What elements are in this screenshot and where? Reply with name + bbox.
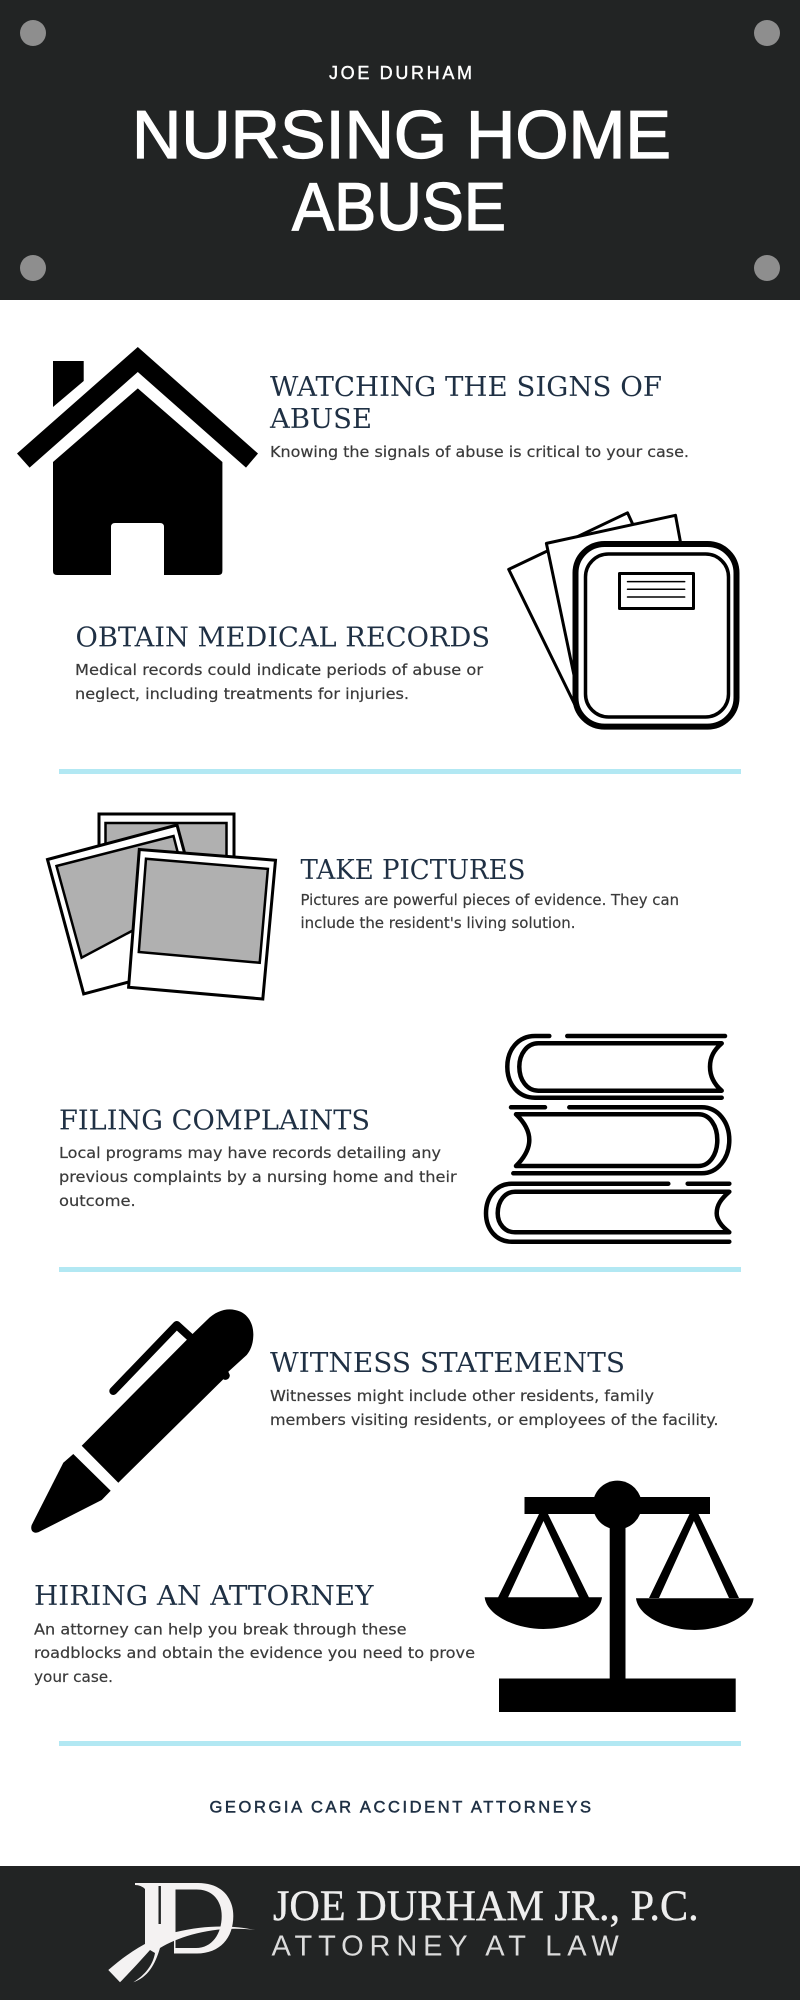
heading: ABUSE [269, 404, 372, 435]
title: NURSING HOME [132, 97, 671, 173]
body text: outcome. [59, 1192, 136, 1210]
header banner [0, 0, 800, 300]
body text: roadblocks and obtain the evidence you need to prove [34, 1644, 475, 1662]
body text: Pictures are powerful pieces of evidence. They can [300, 891, 679, 909]
heading: OBTAIN MEDICAL RECORDS [76, 622, 490, 654]
icon: pen [31, 1309, 253, 1533]
body text: members visiting residents, or employees of the facility. [270, 1411, 718, 1429]
body text: Local programs may have records detailing any [59, 1144, 441, 1162]
panel: hiring an attorney [34, 1481, 754, 1712]
panel: filing complaints [59, 1036, 729, 1242]
icon: house [17, 347, 258, 575]
icon: scales of justice [485, 1481, 754, 1712]
body text: Medical records could indicate periods of abuse or [75, 661, 484, 679]
heading: WITNESS STATEMENTS [270, 1348, 625, 1379]
heading: HIRING AN ATTORNEY [34, 1581, 375, 1612]
logo: attorney at law: ATTORNEY AT LAW [272, 1931, 619, 1963]
body text: An attorney can help you break through these [34, 1620, 407, 1638]
panel: witness statements [31, 1309, 718, 1533]
icon: notebook with papers [509, 513, 736, 727]
body text [270, 1387, 718, 1429]
body text: Witnesses might include other residents, family [270, 1387, 654, 1405]
heading [269, 372, 662, 435]
logo: firm name: JOE DURHAM JR., P.C. [273, 1883, 699, 1930]
corner dots [20, 20, 780, 281]
title [132, 97, 671, 245]
logo: JD monogram [108, 1883, 255, 1982]
heading: TAKE PICTURES [300, 855, 526, 886]
body text: include the resident's living solution. [300, 914, 576, 932]
body text: Knowing the signals of abuse is critical to your case. [270, 443, 689, 461]
heading: WATCHING THE SIGNS OF [270, 372, 662, 403]
body text: previous complaints by a nursing home and their [59, 1168, 457, 1186]
footer banner [0, 1866, 800, 2000]
author name: JOE DURHAM [329, 63, 472, 83]
icon: stack of books [486, 1036, 729, 1242]
body text [300, 891, 679, 932]
title: ABUSE [292, 169, 506, 245]
body text [75, 661, 484, 703]
panel: watching the signs of abuse [17, 347, 689, 575]
heading: FILING COMPLAINTS [59, 1106, 370, 1137]
icon: photographs [48, 814, 276, 999]
panel: take pictures [48, 814, 679, 999]
body text: your case. [34, 1668, 113, 1686]
body text: neglect, including treatments for injuries. [75, 685, 409, 703]
body text [34, 1620, 475, 1686]
panel: obtain medical records [75, 513, 736, 727]
footer tagline: GEORGIA CAR ACCIDENT ATTORNEYS [210, 1799, 591, 1817]
body text [59, 1144, 457, 1210]
